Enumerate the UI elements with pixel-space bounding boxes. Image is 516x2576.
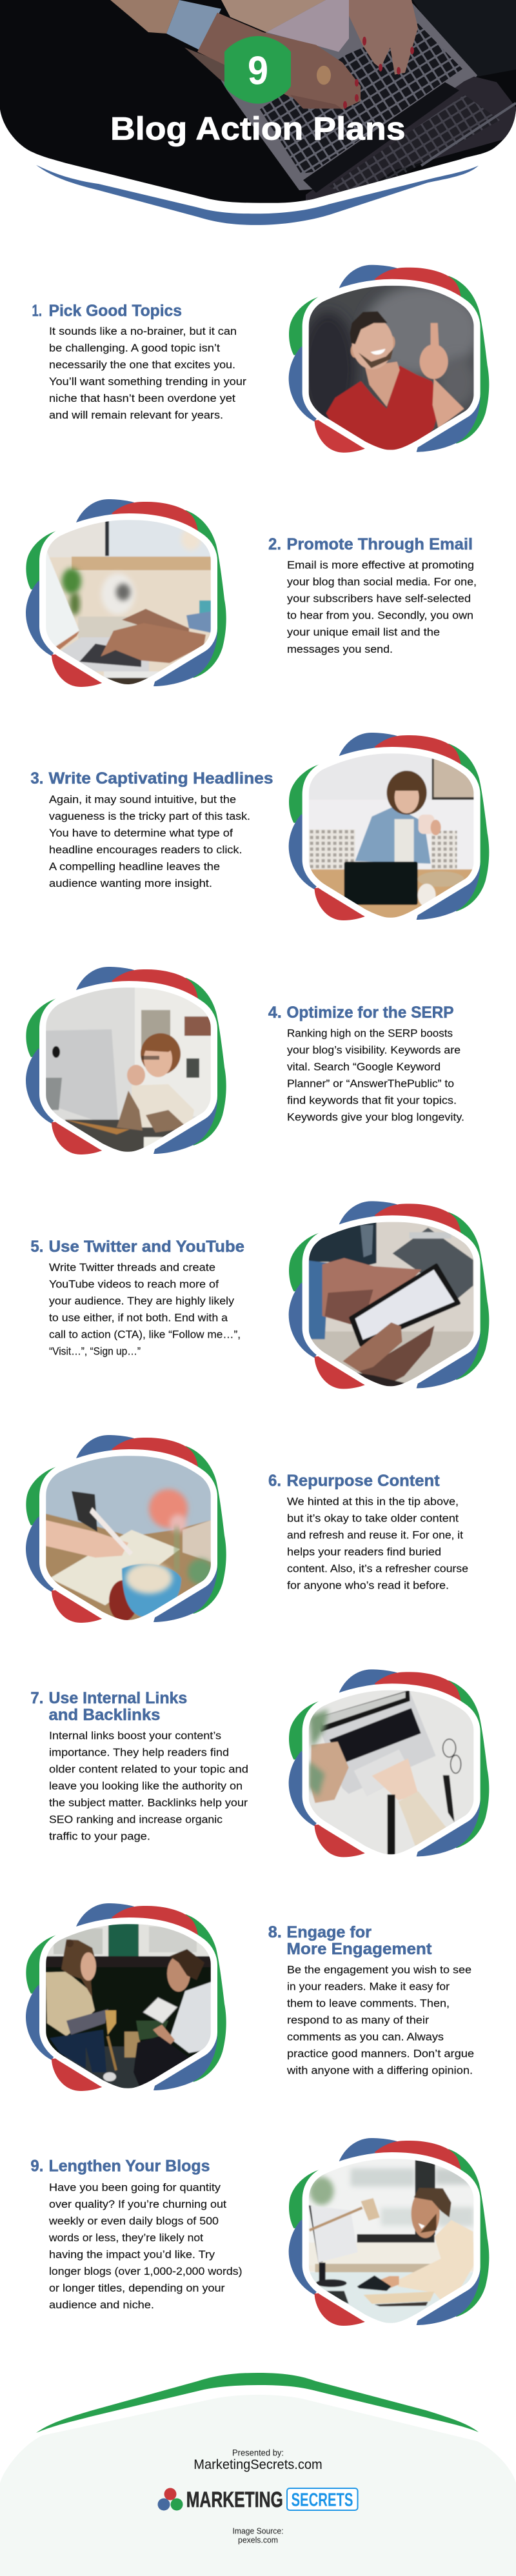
website: MarketingSecrets.com: [194, 2457, 322, 2472]
title: Blog Action Plans: [110, 110, 406, 146]
body 1: [49, 325, 246, 421]
body 3: A compelling headline leaves the: [49, 860, 220, 873]
panel: item 8 text: [268, 1923, 474, 2077]
heading 2: 2.: [268, 535, 281, 553]
body 3: audience wanting more insight.: [49, 877, 212, 889]
heading 3: Write Captivating Headlines: [49, 769, 273, 788]
heading 7: [30, 1689, 187, 1724]
body 8: practice good manners. Don’t argue: [287, 2048, 474, 2060]
body 8: with anyone with a differing opinion.: [286, 2065, 473, 2077]
body 4: Keywords give your blog longevity.: [287, 1111, 464, 1124]
green arc: [36, 2373, 479, 2433]
heading 9: 9.: [30, 2157, 43, 2175]
body 6: [287, 1496, 468, 1592]
heading 9: Lengthen Your Blogs: [49, 2157, 210, 2175]
heading 4: 4.: [268, 1004, 282, 1022]
blue swoosh: [36, 165, 479, 225]
image 9: smiling man at desktop: [289, 2138, 489, 2326]
body 2: messages you send.: [287, 643, 393, 655]
presented by: Presented by:: [232, 2448, 284, 2457]
body 3: You have to determine what type of: [49, 827, 233, 839]
header: [0, 0, 516, 225]
logo box: [287, 2488, 357, 2511]
badge with number 9: 9: [248, 49, 268, 93]
panel: item 9 text: [30, 2157, 243, 2311]
heading 1: Pick Good Topics: [49, 302, 182, 320]
body 4: your blog’s visibility. Keywords are: [287, 1044, 461, 1056]
body 2: your unique email list and the: [287, 626, 440, 639]
image 2: hands typing on laptop: [26, 499, 226, 687]
heading 2: Promote Through Email: [286, 535, 473, 553]
image source: Image Source:: [232, 2526, 284, 2536]
heading 1: 1.: [32, 302, 42, 320]
heading 8: [268, 1923, 432, 1958]
body 7: older content related to your topic and: [49, 1763, 248, 1775]
body 5: Write Twitter threads and create: [49, 1262, 215, 1273]
body 4: find keywords that fit your topics.: [287, 1094, 457, 1107]
body 7: leave you looking like the authority on: [49, 1780, 243, 1792]
body 3: Again, it may sound intuitive, but the: [49, 793, 236, 806]
body 7: traffic to your page.: [49, 1830, 150, 1842]
body 7: SEO ranking and increase organic: [49, 1814, 223, 1825]
image 4: woman at iMac: [26, 967, 226, 1154]
heading 8: More Engagement: [286, 1940, 432, 1958]
logo word: MARKETING: [186, 2488, 283, 2512]
panel: item 3 text: [30, 769, 273, 889]
body 7: importance. They help readers find: [49, 1747, 229, 1758]
body 9: or longer titles, depending on your: [49, 2282, 225, 2294]
heading 7: Use Internal Links: [49, 1689, 187, 1707]
footer: [0, 2373, 516, 2576]
body 3: vagueness is the tricky part of this task.: [49, 810, 250, 822]
body 6: We hinted at this in the tip above,: [287, 1496, 459, 1508]
body 2: your subscribers have self-selected: [287, 592, 471, 605]
body 9: words or less, they’re likely not: [48, 2232, 203, 2244]
body 2: Email is more effective at promoting: [287, 559, 474, 571]
body 4: vital. Search “Google Keyword: [287, 1060, 441, 1073]
heading 6: 6.: [268, 1472, 281, 1490]
heading 5: Use Twitter and YouTube: [49, 1238, 244, 1256]
body 9: longer blogs (over 1,000-2,000 words): [49, 2265, 243, 2277]
panel: item 4 text: [268, 1004, 464, 1124]
heading 7: 7.: [30, 1689, 43, 1707]
body 8: in your readers. Make it easy for: [287, 1981, 450, 1993]
body 5: call to action (CTA), like “Follow me…”,: [49, 1329, 241, 1340]
body 9: audience and niche.: [49, 2299, 154, 2311]
body 9: having the impact you’d like. Try: [49, 2248, 215, 2261]
body 1: It sounds like a no-brainer, but it can: [49, 325, 237, 337]
body 2: to hear from you. Secondly, you own: [287, 609, 473, 622]
body 3: headline encourages readers to click.: [49, 844, 243, 856]
heading 6: Repurpose Content: [286, 1472, 440, 1490]
body 1: necessarily the one that excites you.: [49, 359, 235, 371]
image 6: writing in a notebook: [26, 1435, 226, 1623]
body 1: and will remain relevant for years.: [49, 409, 223, 421]
body 8: Be the engagement you wish to see: [287, 1964, 471, 1976]
image 3: woman with mug and laptop: [289, 733, 489, 920]
image source: pexels.com: [238, 2535, 278, 2545]
body 9: Have you been going for quantity: [49, 2181, 221, 2194]
body 2: your blog than social media. For one,: [287, 575, 477, 588]
body 5: your audience. They are highly likely: [49, 1295, 235, 1307]
body 9: [48, 2181, 243, 2311]
panel: item 6 text: [268, 1472, 468, 1592]
body 6: content. Also, it’s a refresher course: [287, 1563, 468, 1575]
image source: [232, 2526, 284, 2545]
body 6: and refresh and reuse it. For one, it: [287, 1529, 463, 1541]
body 7: [49, 1730, 248, 1842]
body 4: [287, 1027, 464, 1124]
body 6: helps your readers find buried: [287, 1546, 441, 1558]
body 8: respond to as many of their: [287, 2014, 429, 2026]
heading 3: 3.: [30, 769, 43, 788]
body 7: the subject matter. Backlinks help your: [49, 1797, 248, 1808]
body 9: weekly or even daily blogs of 500: [48, 2215, 219, 2227]
footer background: [0, 2395, 516, 2576]
body 2: [287, 559, 477, 655]
panel: item 1 text: [32, 302, 246, 421]
image 5: hands holding smartphone: [289, 1201, 489, 1389]
heading 4: Optimize for the SERP: [286, 1004, 454, 1022]
body 6: for anyone who’s read it before.: [287, 1580, 449, 1592]
heading 8: 8.: [268, 1923, 282, 1941]
panel: item 2 text: [268, 535, 477, 655]
heading 8: Engage for: [286, 1923, 372, 1941]
body 1: be challenging. A good topic isn’t: [49, 342, 220, 354]
badge with number 9: [224, 36, 291, 104]
body 8: them to leave comments. Then,: [287, 1997, 450, 2010]
body 5: YouTube videos to reach more of: [49, 1278, 219, 1290]
header photo: hands on laptop: [0, 0, 516, 208]
body 8: comments as you can. Always: [287, 2031, 444, 2043]
body 5: [49, 1262, 241, 1357]
logo mark: three blobs: [157, 2488, 183, 2510]
body 4: Ranking high on the SERP boosts: [287, 1027, 453, 1040]
heading 7: and Backlinks: [49, 1706, 160, 1724]
image 8: two people talking: [26, 1903, 226, 2091]
panel: item 7 text: [30, 1689, 248, 1842]
body 1: niche that hasn’t been overdone yet: [49, 392, 235, 404]
body 7: Internal links boost your content’s: [49, 1730, 221, 1741]
body 3: [49, 793, 250, 889]
logo: [157, 2488, 357, 2512]
panel: item 5 text: [30, 1238, 244, 1357]
body 6: but it’s okay to take older content: [287, 1512, 459, 1525]
logo box: SECRETS: [292, 2490, 353, 2511]
body 4: Planner” or “AnswerThePublic” to: [287, 1077, 454, 1090]
body 5: to use either, if not both. End with a: [49, 1312, 228, 1323]
body 1: You’ll want something trending in your: [49, 375, 246, 388]
body 8: [286, 1964, 474, 2077]
image 7: overhead laptop and hands: [289, 1669, 489, 1857]
body 5: “Visit…”, “Sign up…”: [49, 1345, 141, 1357]
image 1: man pointing up: [289, 265, 489, 453]
body 9: over quality? If you’re churning out: [49, 2198, 226, 2210]
heading 5: 5.: [30, 1238, 43, 1256]
